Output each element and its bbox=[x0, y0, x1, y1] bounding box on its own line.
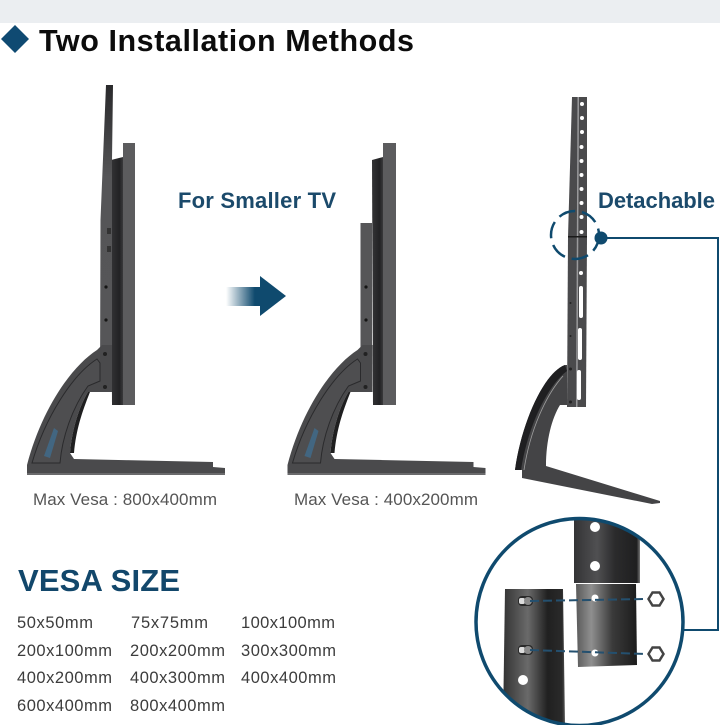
bracket bar bbox=[567, 97, 587, 407]
short post bbox=[360, 223, 372, 392]
connector line bbox=[594, 232, 718, 630]
VESA size list: 50x50mm bbox=[17, 614, 93, 632]
bracket holes bbox=[577, 102, 584, 400]
heading: Two Installation Methods: Two Installation Methods bbox=[39, 24, 414, 58]
lower bracket bbox=[576, 584, 637, 667]
upright post bbox=[100, 85, 113, 392]
holes bbox=[518, 522, 600, 685]
VESA size list: 400x200mm bbox=[17, 669, 112, 687]
figure: detachable bracket bbox=[515, 97, 660, 504]
stand foot bbox=[288, 345, 486, 475]
circle outline bbox=[476, 518, 683, 725]
label: Detachable: Detachable bbox=[598, 188, 715, 213]
TV back panel bbox=[123, 143, 135, 405]
VESA size list: 600x400mm bbox=[17, 697, 112, 715]
dashed guides bbox=[530, 599, 645, 654]
caption: Max Vesa 800x400: Max Vesa : 800x400mm bbox=[33, 490, 217, 509]
TV dark side bbox=[111, 157, 123, 405]
left bracket bbox=[503, 589, 565, 725]
upper bracket bbox=[574, 515, 640, 583]
TV dark side bbox=[372, 157, 383, 405]
post screws bbox=[104, 228, 111, 322]
icon: diamond bullet bbox=[1, 25, 29, 53]
label: For Smaller TV: For Smaller TV bbox=[178, 188, 336, 213]
TV back panel bbox=[383, 143, 396, 405]
VESA size list bbox=[17, 614, 336, 715]
caption: Max Vesa 400x200: Max Vesa : 400x200mm bbox=[294, 490, 478, 509]
stand foot bbox=[27, 345, 225, 475]
VESA size list: 100x100mm bbox=[241, 614, 335, 632]
bracket foot bbox=[515, 365, 660, 504]
VESA size list: 200x100mm bbox=[17, 642, 112, 660]
VESA size list: 400x300mm bbox=[130, 669, 225, 687]
arrow bbox=[226, 276, 286, 316]
VESA size list: 800x400mm bbox=[130, 697, 225, 715]
figure: large TV stand bbox=[27, 85, 225, 475]
post screws bbox=[364, 285, 368, 322]
detail circle bbox=[476, 515, 683, 725]
nuts bbox=[648, 592, 664, 660]
dashed circle marker bbox=[551, 211, 599, 259]
VESA size list: 300x300mm bbox=[241, 642, 336, 660]
studs bbox=[518, 596, 533, 655]
top grey band bbox=[0, 0, 720, 23]
heading: VESA SIZE: VESA SIZE bbox=[18, 563, 180, 598]
figure: small TV stand bbox=[288, 143, 486, 475]
VESA size list: 400x400mm bbox=[241, 669, 336, 687]
VESA size list: 75x75mm bbox=[131, 614, 208, 632]
VESA size list: 200x200mm bbox=[130, 642, 225, 660]
